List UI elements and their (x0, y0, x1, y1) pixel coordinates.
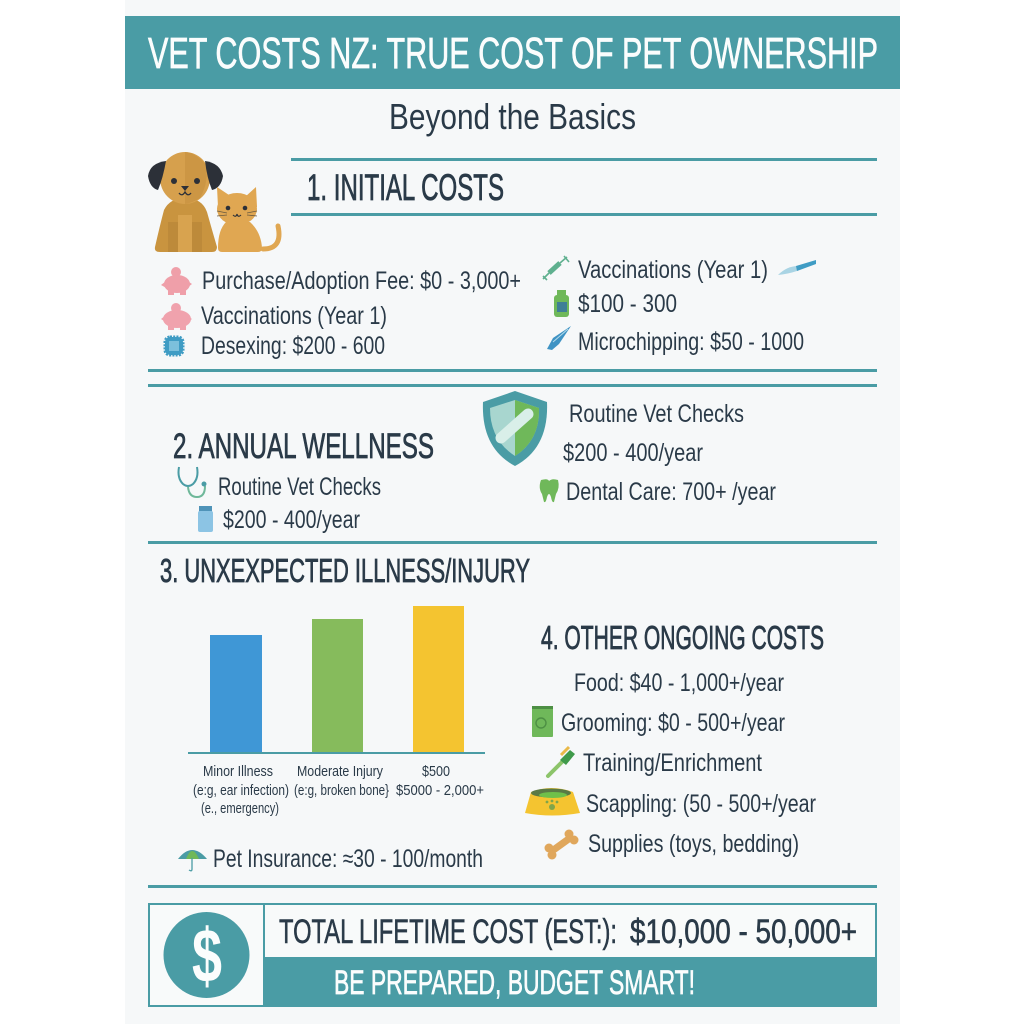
icon: pet bowl (525, 788, 580, 816)
list: initial costs right: Microchipping: $50 - 1000 (578, 328, 804, 356)
icon: piggy bank (161, 303, 192, 330)
icon: umbrella (178, 850, 207, 871)
chart labels (193, 763, 484, 817)
total lifetime cost text: $10,000 - 50,000+ (630, 913, 857, 951)
icon: tooth (540, 479, 559, 502)
icon: microchip (165, 337, 183, 355)
list: initial costs left (161, 267, 521, 360)
panel: annual wellness: Dental Care: 700+ /year (566, 478, 776, 506)
chart labels: Minor Illness (203, 763, 273, 780)
icon: vial (198, 506, 213, 532)
list: initial costs right (543, 256, 816, 356)
panel: annual wellness: Routine Vet Checks (218, 473, 381, 501)
panel: unexpected illness: Pet Insurance: ≈30 - 100/month (213, 845, 483, 873)
panel: other ongoing costs: Scappling: (50 - 500+/year (586, 790, 816, 818)
heading: initial costs: 1. INITIAL COSTS (307, 167, 504, 208)
panel: annual wellness: Routine Vet Checks (569, 400, 744, 428)
list: initial costs left: Purchase/Adoption Fee: $0 - 3,000+ (202, 267, 521, 295)
icon: stethoscope (178, 467, 206, 497)
list: initial costs left: Desexing: $200 - 600 (201, 332, 385, 360)
panel: annual wellness: $200 - 400/year (223, 506, 360, 534)
icon: dollar coin (164, 912, 250, 999)
panel: annual wellness (173, 391, 776, 534)
panel: initial costs (148, 152, 877, 360)
total lifetime cost text: TOTAL LIFETIME COST (EST:): (279, 913, 617, 951)
panel: total lifetime cost (149, 904, 877, 1007)
chart labels: (e:g, broken bone} (294, 782, 389, 799)
bar chart (188, 606, 485, 754)
chart labels: $500 (422, 763, 450, 780)
icon: syringe (543, 256, 569, 280)
subtitle: Beyond the Basics (389, 96, 636, 137)
icon: scalpel (778, 260, 816, 275)
chart labels: (e:g, ear infection) (193, 782, 289, 799)
panel: annual wellness: $200 - 400/year (563, 439, 703, 467)
icon: food bag (532, 706, 553, 737)
panel: other ongoing costs: Food: $40 - 1,000+/year (574, 669, 784, 697)
title banner (125, 16, 900, 89)
panel: other ongoing costs: Grooming: $0 - 500+/year (561, 709, 785, 737)
chart labels: Moderate Injury (297, 763, 383, 780)
list: initial costs right: Vaccinations (Year 1) (578, 256, 768, 284)
chart labels: $5000 - 2,000+ (396, 782, 484, 799)
list: initial costs left: Vaccinations (Year 1) (201, 302, 387, 330)
icon: dog and cat (148, 152, 279, 252)
heading: other ongoing costs: 4. OTHER ONGOING COSTS (541, 619, 824, 656)
panel: other ongoing costs (525, 619, 824, 860)
heading: annual wellness: 2. ANNUAL WELLNESS (173, 427, 434, 466)
heading: unexpected illness: 3. UNXEXPECTED ILLNESS/INJURY (160, 552, 530, 589)
panel: other ongoing costs: Supplies (toys, bedding) (588, 830, 799, 858)
list: initial costs right: $100 - 300 (578, 290, 677, 318)
heading: initial costs (291, 158, 877, 216)
icon: bone (544, 830, 578, 860)
icon: dollar coin: $ (192, 914, 222, 999)
chart labels: (e., emergency) (201, 800, 279, 817)
call to action: BE PREPARED, BUDGET SMART! (334, 964, 695, 1002)
panel: unexpected illness (160, 552, 530, 873)
icon: grooming brush (548, 747, 575, 776)
panel: other ongoing costs: Training/Enrichment (583, 749, 762, 777)
icon: shield with bandage (483, 391, 547, 466)
icon: microchip injector (547, 326, 571, 350)
icon: medicine bottle (554, 290, 569, 317)
icon: piggy bank (161, 267, 192, 295)
